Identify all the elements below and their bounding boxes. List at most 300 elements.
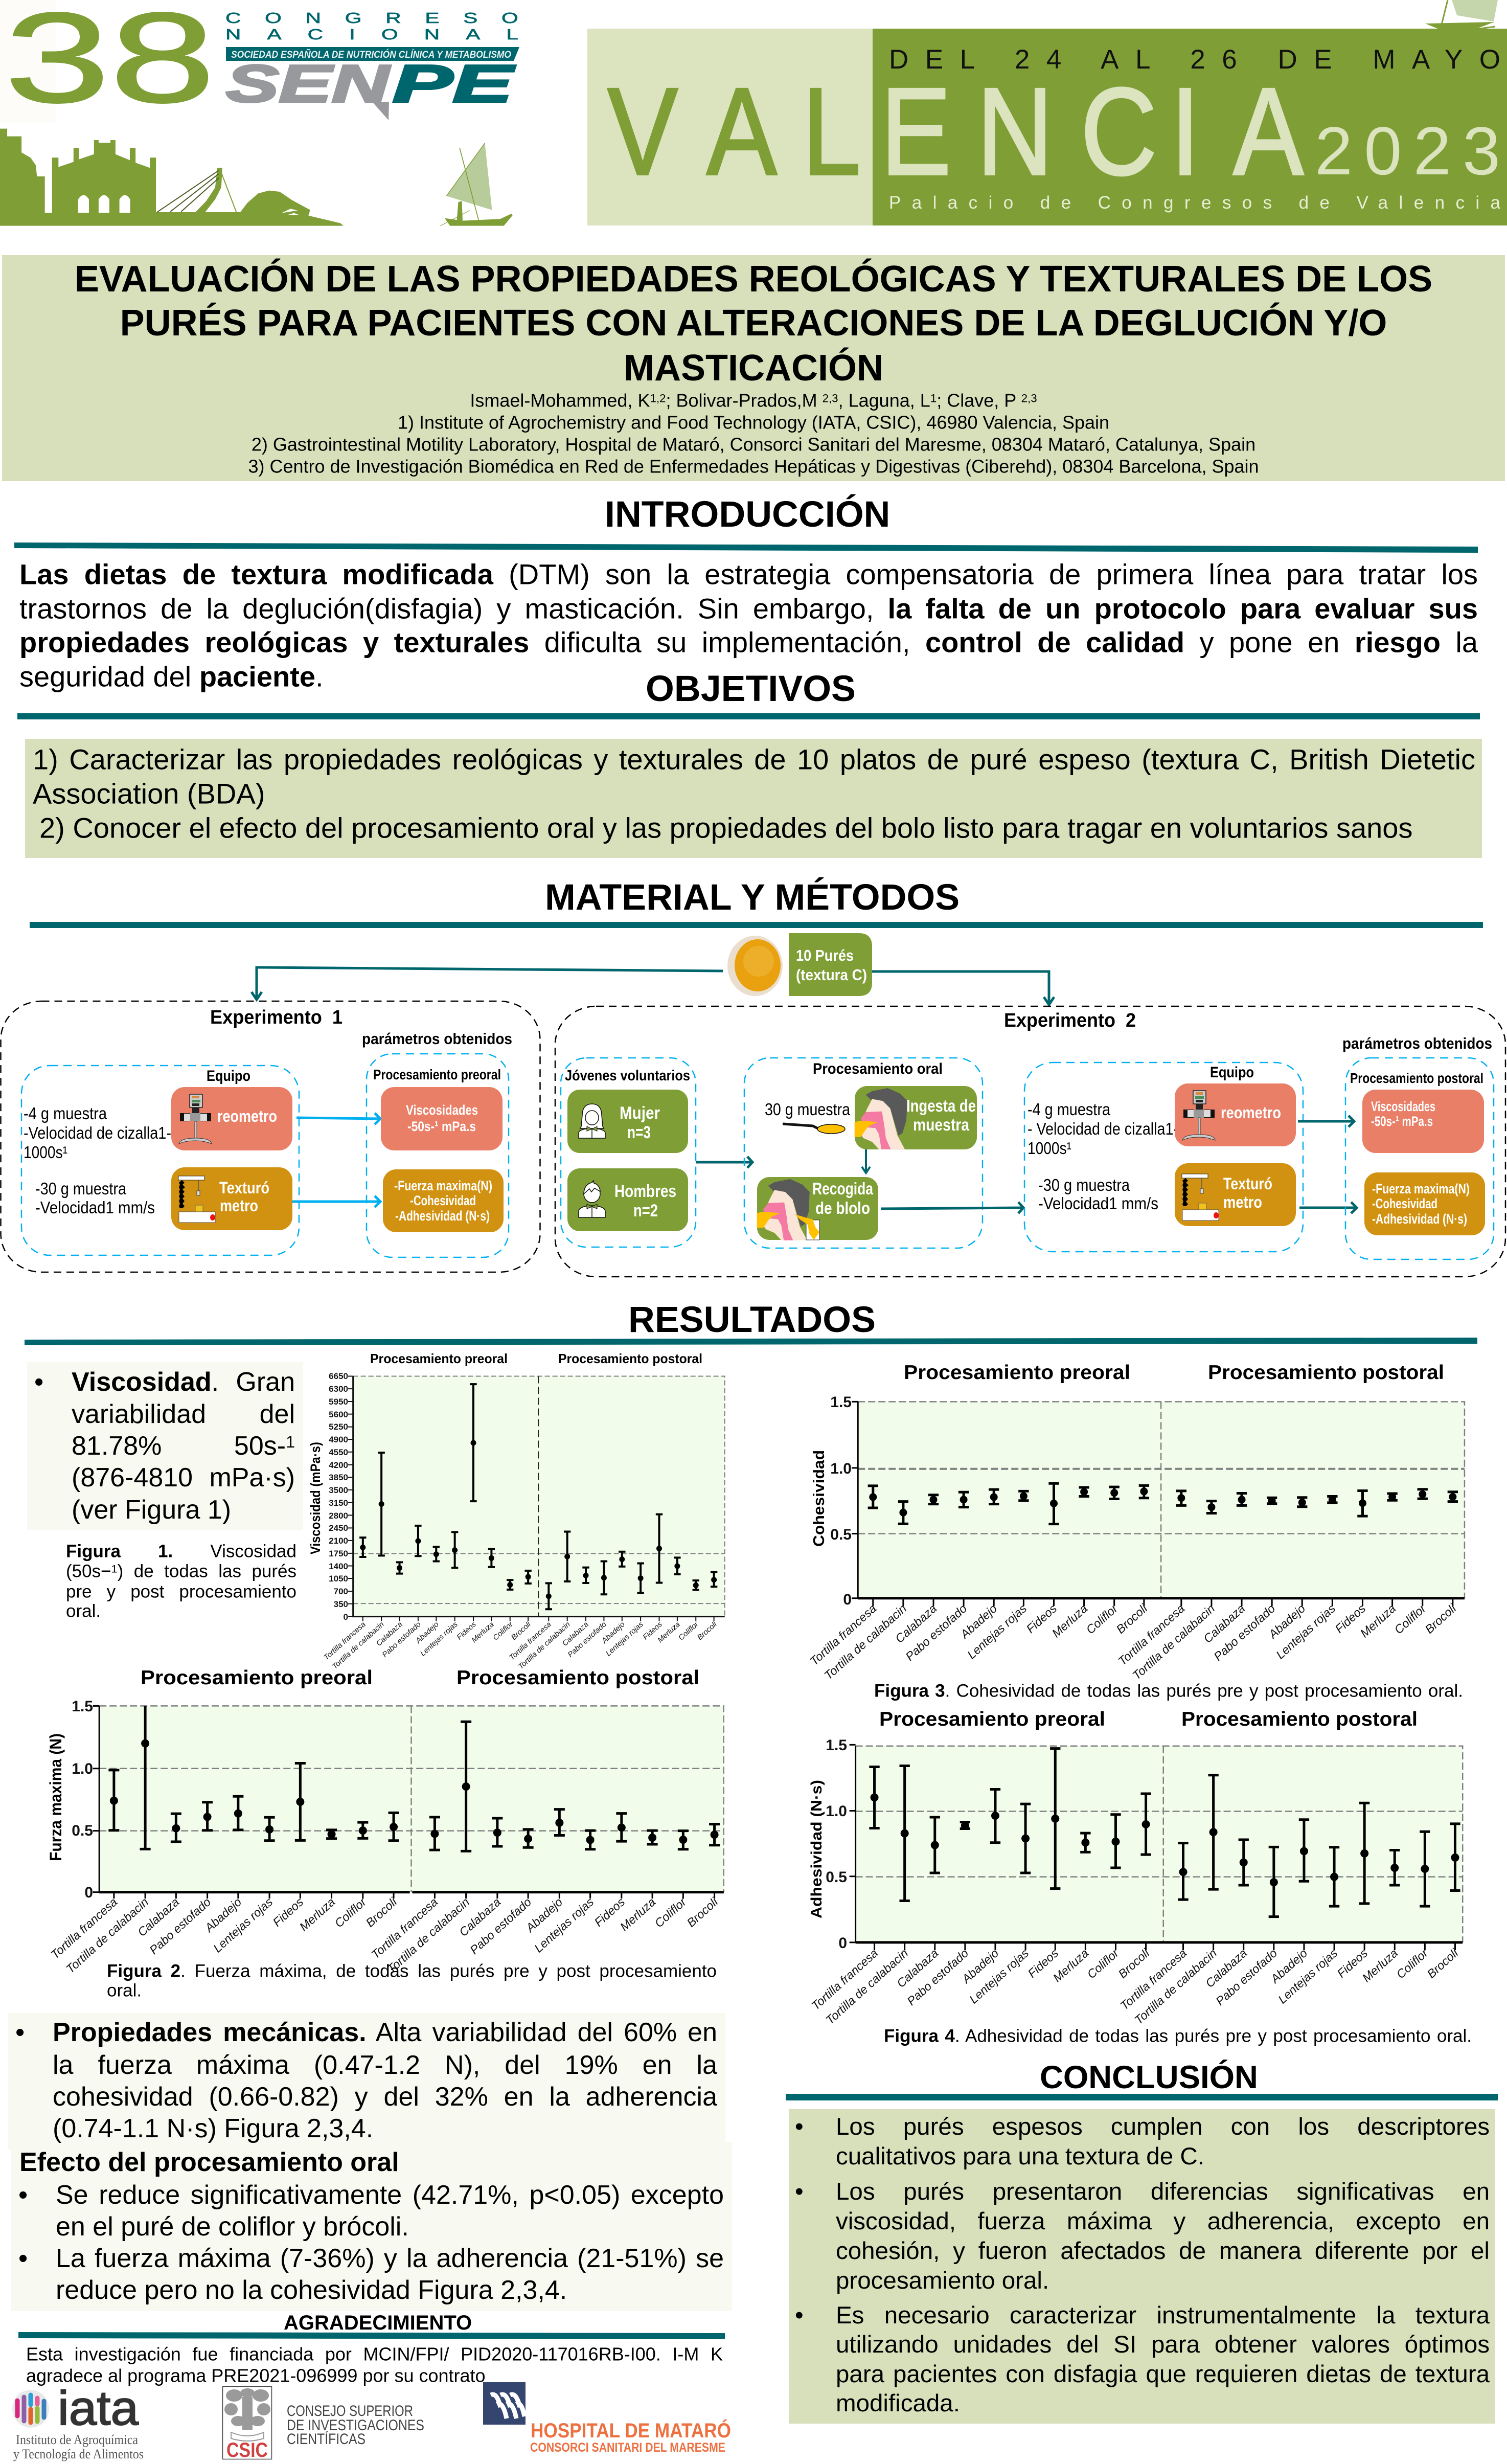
x axis labels: [323, 1620, 719, 1671]
Valencia skyline: [0, 129, 343, 226]
x axis labels: [807, 1601, 1459, 1682]
x axis labels: [809, 1946, 1461, 2027]
chart titles: Procesamiento postoral: [558, 1351, 702, 1366]
box: hombres: n=2: [633, 1201, 658, 1220]
panel: propiedades mecánicas and efecto del procesamiento oral: cohesividad (0.66-0.82) y del 32% en la adherencia: [53, 2082, 717, 2112]
box: texturometro: metro: [220, 1196, 258, 1215]
panel: propiedades mecánicas and efecto del procesamiento oral: •: [15, 2018, 25, 2047]
chart: figura 3 cohesividad: [803, 1360, 1472, 1692]
y axis scale: 0.5: [830, 1526, 852, 1543]
CSIC name: CIENTÍFICAS: [287, 2431, 366, 2448]
panel: conclusión: Los purés presentaron diferencias significativas en: [836, 2178, 1490, 2205]
x axis labels: Pabo estofado: [381, 1620, 423, 1659]
group: procesamiento oral: 30 g muestra: [765, 1100, 851, 1119]
caption: figura 2: [107, 1961, 717, 2000]
y axis scale: 1.0: [72, 1760, 93, 1777]
group: equipo: 1000s¹: [1028, 1139, 1071, 1158]
box: reometro: reometro: [1221, 1103, 1281, 1122]
x axis labels: Lentejas rojas: [1275, 1946, 1340, 2006]
box: fuerza, cohesividad, adhesividad: [383, 1169, 504, 1232]
arrow: to experimento 2: [872, 971, 1054, 1005]
x axis labels: Lentejas rojas: [419, 1620, 460, 1658]
caption: figura 1: [66, 1541, 296, 1621]
heading: parámetros obtenidos: parámetros obtenidos: [362, 1030, 512, 1048]
x axis labels: Coliflor: [1392, 1601, 1429, 1637]
y axis scale: 700: [334, 1587, 348, 1596]
x axis labels: Brocoli: [1116, 1946, 1152, 1981]
group: equipo: -30 g muestra: [1038, 1176, 1130, 1194]
arrow: texturometro to parameters: [292, 1196, 380, 1207]
viscosity error bars: [359, 1384, 717, 1609]
x axis labels: Calabaza: [1201, 1601, 1247, 1645]
box: viscosidades: -50s-¹ mPa.s: [407, 1119, 476, 1134]
box: 10 purés textura C: (textura C): [796, 966, 867, 984]
panel: conclusión: Los purés espesos cumplen con los descriptores: [836, 2113, 1490, 2140]
caption: figura 4: Figura 4. Adhesividad de todas las purés pre y post procesamiento oral.: [884, 2026, 1472, 2046]
box: ingesta de muestra: Ingesta de: [906, 1096, 976, 1115]
panel: viscosidad: •: [34, 1367, 43, 1397]
panel: propiedades mecánicas and efecto del procesamiento oral: (0.74-1.1 N·s) Figura 2,3,4.: [53, 2114, 373, 2143]
group: equipo: -30 g muestra: [35, 1179, 127, 1198]
panel: objetivos: Association (BDA): [33, 778, 265, 810]
x axis labels: Calabaza: [456, 1895, 503, 1939]
chart: figura 1 viscosidad: [308, 1351, 725, 1671]
panel: conclusión: viscosidad, fuerza máxima y adherencia, excepto en: [836, 2208, 1490, 2235]
caption: figura 2: oral.: [107, 1980, 142, 2000]
x axis labels: Merluza: [470, 1620, 496, 1644]
congreso nacional wordmark: [225, 10, 518, 42]
panel: conclusión: modificada.: [836, 2390, 960, 2417]
x axis labels: Lentejas rojas: [965, 1601, 1030, 1662]
group: jóvenes voluntarios: Jóvenes voluntarios: [565, 1068, 690, 1084]
x axis labels: Merluza: [1358, 1601, 1398, 1640]
panel: conclusión: •: [795, 2178, 804, 2205]
y axis scale: 4900: [329, 1435, 348, 1444]
y axis scale: 1.0: [830, 1460, 852, 1477]
group: equipo: [1024, 1063, 1303, 1252]
x axis labels: Lentejas rojas: [967, 1946, 1032, 2006]
panel: propiedades mecánicas and efecto del procesamiento oral: [8, 2013, 732, 2311]
box: texturometro: Texturó: [219, 1179, 269, 1197]
box: mujer: [567, 1090, 688, 1153]
y axis scale: 350: [334, 1599, 348, 1609]
y axis title: Cohesividad: [810, 1450, 828, 1547]
city name: ENCIA: [881, 62, 1304, 201]
arrow: reometro to viscosidades: [1298, 1116, 1354, 1127]
group: procesamiento postoral parameters: [1345, 1058, 1494, 1259]
authors and affiliations: 1) Institute of Agrochemistry and Food Technology (IATA, CSIC), 46980 Valencia, Spain: [398, 412, 1109, 433]
panel: conclusión: cohesión, y fueron afectados de manera diferente por el: [836, 2237, 1490, 2265]
x axis labels: Tortilla francesa: [809, 1946, 880, 2013]
divider: conclusión: [786, 2094, 1498, 2100]
plot area: [850, 1745, 1463, 1950]
arrow: voluntarios to procesamiento oral: [696, 1157, 752, 1168]
box: texturometro: Texturó: [1223, 1174, 1272, 1193]
y axis scale: 3150: [329, 1498, 348, 1508]
panel: propiedades mecánicas and efecto del procesamiento oral: •: [18, 2244, 28, 2273]
box: fuerza, cohesividad, adhesividad: -Cohesividad: [1372, 1196, 1437, 1211]
y axis scale: 1400: [329, 1562, 348, 1571]
panel: propiedades mecánicas and efecto del procesamiento oral: en el puré de coliflor y brócoli.: [56, 2212, 409, 2242]
box: fuerza, cohesividad, adhesividad: -Fuerza maxima(N): [1372, 1181, 1470, 1196]
divider: resultados: [25, 1338, 1477, 1345]
y axis scale: 4550: [329, 1448, 348, 1457]
x axis labels: Fideos: [592, 1895, 628, 1929]
panel: propiedades mecánicas and efecto del procesamiento oral: La fuerza máxima (7-36%) y la adherencia (21-51%) se: [56, 2244, 724, 2273]
x axis labels: Tortilla francesa: [323, 1620, 368, 1662]
heading: objetivos: OBJETIVOS: [646, 668, 856, 709]
panel: propiedades mecánicas and efecto del procesamiento oral: Se reduce significativamente (42.71%, p<0.05) excepto: [56, 2180, 724, 2210]
y axis scale: 4200: [329, 1460, 348, 1470]
x axis labels: Brocoli: [363, 1895, 400, 1930]
panel: objetivos: [25, 739, 1482, 858]
panel: viscosidad: (ver Figura 1): [72, 1495, 231, 1525]
box: viscosidades: [1362, 1090, 1484, 1153]
group: equipo: [21, 1066, 299, 1255]
box: fuerza, cohesividad, adhesividad: -Adhesividad (N·s): [395, 1208, 490, 1224]
box: recogida de bolo: de blolo: [815, 1199, 870, 1217]
x axis labels: Abadejo: [522, 1895, 565, 1935]
panel: conclusión: •: [795, 2302, 804, 2329]
x axis labels: Brocoli: [696, 1620, 719, 1642]
icon: bowl of purée: [727, 936, 783, 996]
group: equipo: Equipo: [1210, 1064, 1254, 1081]
x axis labels: Lentejas rojas: [1273, 1601, 1338, 1662]
y axis scale: 1750: [329, 1549, 348, 1558]
panel: experimento 1: [1, 1001, 540, 1272]
x axis labels: Brocoli: [510, 1620, 533, 1642]
text block: introducción: Las dietas de textura modificada (DTM) son la estrategia compensatoria de primera línea para tratar los: [19, 558, 1478, 591]
divider: agradecimiento: [18, 2332, 725, 2339]
x axis labels: Coliflor: [492, 1620, 515, 1642]
CSIC name: [287, 2403, 424, 2448]
chart titles: [904, 1362, 1444, 1384]
CSIC emblem: [223, 2387, 272, 2461]
text block: introducción: [19, 558, 1478, 693]
text block: agradecimiento: agradece al programa PRE2021-096999 por su contrato: [26, 2365, 486, 2386]
group: equipo: - Velocidad de cizalla1-: [1028, 1119, 1178, 1138]
arrow: reometro to viscosidades: [296, 1113, 380, 1124]
y axis scale: 1.5: [826, 1737, 847, 1754]
logo: CSIC: [220, 2383, 429, 2462]
x axis labels: Fideos: [270, 1895, 306, 1929]
divider: introducción: [14, 542, 1478, 553]
authors and affiliations: 3) Centro de Investigación Biomédica en Red de Enfermedades Hepáticas y Digestivas (Ciberehd), 08304 Barcelona, Spain: [248, 456, 1259, 477]
box: recogida de bolo: [757, 1177, 878, 1240]
box: ingesta de muestra: muestra: [913, 1115, 970, 1134]
y axis scale: 5600: [329, 1410, 348, 1419]
x axis labels: Merluza: [1049, 1601, 1090, 1640]
y axis scale: 0: [843, 1591, 852, 1608]
y axis scale: [830, 1394, 852, 1608]
group: equipo: -Velocidad1 mm/s: [35, 1198, 155, 1217]
chart: figura 2 fuerza máxima: [47, 1667, 724, 1976]
x axis labels: Fideos: [1024, 1601, 1060, 1636]
panel: conclusión: •: [795, 2113, 804, 2140]
box: reometro: [1175, 1083, 1296, 1146]
x axis labels: Tortilla francesa: [1117, 1946, 1189, 2013]
x axis labels: Coliflor: [332, 1895, 369, 1930]
x axis labels: Pabo estofado: [147, 1895, 213, 1957]
authors and affiliations: 2) Gastrointestinal Motility Laboratory, Hospital de Mataró, Consorci Sanitari del Maresme, 08304 Mataró, Catalunya, Spain: [252, 434, 1255, 455]
divider: material y métodos: [30, 922, 1483, 928]
x axis labels: Fideos: [455, 1620, 478, 1642]
panel: conclusión: cualitativos para una textura de C.: [836, 2143, 1204, 2170]
panel: conclusión: para pacientes con disfagia que requieren dietas de textura: [836, 2361, 1490, 2388]
heading: resultados: RESULTADOS: [628, 1299, 876, 1340]
chart titles: Procesamiento preoral: [879, 1708, 1105, 1730]
x axis labels: Pabo estofado: [904, 1946, 971, 2008]
heading: introducción: INTRODUCCIÓN: [605, 494, 890, 535]
box: 10 purés textura C: [789, 933, 872, 996]
panel: experimento 2: [555, 1006, 1505, 1277]
x axis labels: Calabaza: [893, 1601, 939, 1645]
group: equipo: Equipo: [207, 1068, 250, 1084]
group: jóvenes voluntarios: [561, 1058, 696, 1247]
x axis labels: Coliflor: [652, 1895, 689, 1930]
box: viscosidades: Viscosidades: [1371, 1099, 1435, 1114]
logo: 38 congreso nacional SENPE with Valencia skyline: [0, 0, 519, 226]
chart titles: Procesamiento preoral: [141, 1667, 373, 1689]
y axis scale: [826, 1737, 847, 1952]
panel: propiedades mecánicas and efecto del procesamiento oral: reduce pero no la cohesividad Figura 2,3,4.: [56, 2275, 567, 2305]
x axis labels: Calabaza: [894, 1946, 941, 1990]
caption: figura 2: Figura 2. Fuerza máxima, de todas las purés pre y post procesamiento: [107, 1961, 717, 1981]
box: recogida de bolo: Recogida: [812, 1179, 874, 1198]
x axis labels: Fideos: [1333, 1601, 1368, 1636]
x axis labels: Coliflor: [677, 1620, 700, 1642]
group: procesamiento preoral parameters: [367, 1054, 509, 1257]
box: viscosidades: -50s-¹ mPa.s: [1371, 1114, 1433, 1129]
x axis labels: Tortilla de calabacin: [331, 1620, 386, 1671]
adhesiveness error bars: [869, 1749, 1460, 1917]
group: procesamiento oral: Procesamiento oral: [813, 1060, 943, 1077]
text block: introducción: propiedades reológicas y texturales dificulta su implementación, control de calidad y pone en riesgo la: [19, 626, 1478, 659]
group: procesamiento oral: [744, 1058, 983, 1248]
chart titles: Procesamiento preoral: [370, 1351, 508, 1366]
x axis labels: Calabaza: [561, 1620, 590, 1648]
panel: propiedades mecánicas and efecto del procesamiento oral: Propiedades mecánicas. Alta variabilidad del 60% en: [53, 2018, 717, 2047]
x axis labels: Brocoli: [1425, 1946, 1461, 1981]
caption: figura 1: Figura 1. Viscosidad: [66, 1541, 296, 1561]
panel: objetivos: 1) Caracterizar las propiedades reológicas y texturales de 10 platos de puré espeso (textura C, British Dietetic: [33, 743, 1475, 776]
x axis labels: Abadejo: [957, 1601, 999, 1642]
heading: conclusión: CONCLUSIÓN: [1040, 2060, 1258, 2095]
y axis scale: 5250: [329, 1422, 348, 1432]
x axis labels: Coliflor: [1085, 1946, 1122, 1981]
Mataró emblem: [483, 2382, 526, 2425]
x axis labels: Abadejo: [1267, 1946, 1310, 1986]
x axis labels: Merluza: [1051, 1946, 1091, 1985]
y axis scale: 1050: [329, 1574, 348, 1584]
CSIC emblem: CSIC: [226, 2439, 268, 2461]
x axis labels: Pabo estofado: [566, 1620, 608, 1659]
SENPE logotype: PE: [393, 54, 516, 113]
x axis labels: Tortilla de calabacin: [821, 1601, 909, 1682]
x axis labels: Coliflor: [1084, 1601, 1121, 1637]
iata colored mark: [12, 2390, 49, 2428]
box: hombres: [567, 1168, 688, 1231]
x axis labels: Coliflor: [1394, 1946, 1431, 1981]
x axis labels: Merluza: [656, 1620, 682, 1644]
panel: viscosidad: (876-4810 mPa·s): [72, 1463, 295, 1493]
main title: PURÉS PARA PACIENTES CON ALTERACIONES DE LA DEGLUCIÓN Y/O: [120, 303, 1387, 344]
title panel: [2, 255, 1505, 481]
arrow: texturometro to parameters: [1299, 1202, 1357, 1213]
main title: EVALUACIÓN DE LAS PROPIEDADES REOLÓGICAS Y TEXTURALES DE LOS: [75, 259, 1432, 300]
x axis labels: [48, 1895, 721, 1976]
x axis labels: Tortilla francesa: [369, 1895, 440, 1961]
x axis labels: Brocoli: [684, 1895, 721, 1930]
x axis labels: Tortilla de calabacin: [384, 1895, 472, 1976]
box: 10 purés textura C: 10 Purés: [796, 946, 854, 964]
box: fuerza, cohesividad, adhesividad: -Adhesividad (N·s): [1372, 1211, 1467, 1227]
panel: conclusión: Es necesario caracterizar instrumentalmente la textura: [836, 2302, 1490, 2329]
box: ingesta de muestra: [855, 1086, 977, 1149]
divider: objetivos: [17, 713, 1480, 719]
panel: objetivos: 2) Conocer el efecto del procesamiento oral y las propiedades del bolo listo para tragar en voluntarios sanos: [39, 812, 1412, 844]
text block: agradecimiento: [26, 2344, 723, 2389]
x axis labels: Tortilla de calabacin: [1132, 1946, 1219, 2027]
y axis title: Furza maxima (N): [47, 1733, 65, 1861]
group: equipo: -Velocidad1 mm/s: [1038, 1194, 1158, 1213]
caption: figura 1: oral.: [66, 1601, 101, 1621]
x axis labels: Tortilla francesa: [807, 1601, 879, 1668]
logo: Hospital de Mataró: [481, 2380, 734, 2457]
panel: conclusión: [789, 2109, 1495, 2424]
box: viscosidades: Viscosidades: [406, 1102, 478, 1118]
x axis labels: Fideos: [1335, 1946, 1371, 1980]
banner: del 24 al 26 de mayo, Valencia 2023: [587, 0, 1507, 225]
group: equipo: -4 g muestra: [1028, 1100, 1111, 1119]
x axis labels: Tortilla francesa: [48, 1895, 120, 1961]
y axis scale: 0: [84, 1884, 93, 1901]
x axis labels: Abadejo: [958, 1946, 1001, 1986]
SENPE logotype: [226, 54, 516, 120]
x axis labels: Tortilla de calabacin: [1130, 1601, 1217, 1682]
x axis labels: Pabo estofado: [467, 1895, 534, 1957]
box: reometro: [171, 1087, 292, 1150]
cohesiveness error bars: [868, 1483, 1458, 1524]
y axis title: Viscosidad (mPa·s): [308, 1442, 323, 1554]
x axis labels: Calabaza: [375, 1620, 404, 1648]
x axis labels: Tortilla francesa: [508, 1620, 553, 1662]
institute name: Instituto de Agroquímica: [16, 2432, 138, 2447]
plot area: [348, 1376, 725, 1621]
text block: agradecimiento: Esta investigación fue financiada por MCIN/FPI/ PID2020-117016RB-I00. I-M K: [26, 2344, 723, 2365]
y axis scale: 0: [344, 1612, 348, 1622]
box: fuerza, cohesividad, adhesividad: -Cohesividad: [410, 1193, 476, 1208]
chart titles: [141, 1667, 699, 1689]
caption: figura 3: Figura 3. Cohesividad de todas las purés pre y post procesamiento oral.: [874, 1681, 1463, 1701]
icon: spoon: [783, 1124, 845, 1134]
small boat: [1422, 0, 1498, 36]
heading: experimento 2: Experimento 2: [1004, 1010, 1136, 1031]
group: procesamiento preoral parameters: Procesamiento preoral: [373, 1067, 501, 1082]
x axis labels: Pabo estofado: [903, 1601, 969, 1663]
flow diagram: methods: [0, 933, 1506, 1277]
congreso nacional wordmark: CONGRESO: [225, 10, 518, 26]
y axis scale: 0.5: [72, 1822, 93, 1839]
heading: parámetros obtenidos: parámetros obtenidos: [1342, 1034, 1492, 1052]
x axis labels: Abadejo: [600, 1620, 627, 1645]
x axis labels: Fideos: [642, 1620, 664, 1642]
x axis labels: Brocoli: [1114, 1601, 1150, 1636]
y axis scale: 2800: [329, 1511, 348, 1521]
y axis scale: [72, 1698, 93, 1901]
y axis scale: 0: [838, 1935, 847, 1952]
x axis labels: Tortilla de calabacin: [63, 1895, 151, 1976]
panel: viscosidad: Viscosidad. Gran: [72, 1367, 295, 1397]
x axis labels: Tortilla de calabacin: [823, 1946, 910, 2027]
box: hombres: Hombres: [614, 1182, 676, 1201]
group: equipo: -4 g muestra: [24, 1104, 107, 1123]
caption: figura 1: pre y post procesamiento: [66, 1581, 296, 1601]
plot area: [852, 1401, 1465, 1606]
group: equipo: -Velocidad de cizalla1-: [24, 1123, 171, 1142]
year: 2023: [1315, 114, 1500, 189]
text block: introducción: seguridad del paciente.: [19, 661, 324, 693]
x axis labels: Lentejas rojas: [604, 1620, 645, 1658]
y axis scale: 2450: [329, 1523, 348, 1533]
y axis scale: 6300: [329, 1384, 348, 1394]
x axis labels: Fideos: [1025, 1946, 1061, 1980]
logo: iata: [10, 2388, 148, 2462]
x axis labels: Abadejo: [201, 1895, 244, 1935]
y axis scale: 1.5: [830, 1394, 852, 1411]
x axis labels: Tortilla francesa: [1115, 1601, 1187, 1668]
main title: [75, 259, 1432, 389]
box: viscosidades: [381, 1087, 503, 1150]
sailing boat: [440, 143, 513, 226]
panel: viscosidad: 81.78% 50s-1: [72, 1431, 295, 1461]
panel: viscosidad: variabilidad del: [72, 1399, 295, 1429]
panel: conclusión: procesamiento oral.: [836, 2267, 1049, 2294]
x axis labels: Lentejas rojas: [211, 1895, 276, 1955]
x axis labels: Pabo estofado: [1211, 1601, 1277, 1663]
box: mujer: Mujer: [620, 1103, 660, 1123]
box: mujer: n=3: [627, 1123, 651, 1142]
panel: conclusión: utilizando unidades del SI para obtener valores óptimos: [836, 2331, 1490, 2358]
box: fuerza, cohesividad, adhesividad: -Fuerza maxima(N): [394, 1178, 492, 1193]
city name: [607, 62, 1304, 201]
y axis scale: 0.5: [826, 1869, 847, 1886]
x axis labels: Brocoli: [1423, 1601, 1459, 1636]
panel: propiedades mecánicas and efecto del procesamiento oral: •: [18, 2180, 28, 2210]
box: texturometro: metro: [1223, 1193, 1262, 1211]
main title: MASTICACIÓN: [624, 348, 883, 389]
x axis labels: Lentejas rojas: [532, 1895, 597, 1955]
venue: Palacio de Congresos de Valencia: [889, 193, 1501, 213]
box: texturometro: [1175, 1163, 1296, 1226]
city name: VAL: [607, 62, 861, 201]
x axis labels: Pabo estofado: [1213, 1946, 1280, 2008]
plot area: [93, 1706, 724, 1898]
x axis labels: Calabaza: [1203, 1946, 1249, 1990]
authors and affiliations: Ismael-Mohammed, K1,2; Bolivar-Prados,M 2,3, Laguna, L1; Clave, P 2,3: [470, 390, 1037, 411]
box: texturometro: [171, 1167, 292, 1230]
chart titles: Procesamiento postoral: [1208, 1362, 1444, 1384]
caption: figura 1: (50s−1) de todas las purés: [66, 1561, 296, 1581]
box: reometro: reometro: [217, 1107, 277, 1125]
y axis scale: 2100: [329, 1536, 348, 1546]
y axis scale: 3500: [329, 1485, 348, 1495]
chart titles: [879, 1708, 1418, 1730]
y axis scale: 3850: [329, 1473, 348, 1482]
heading: agradecimiento: AGRADECIMIENTO: [284, 2312, 472, 2334]
SENPE logotype: SEN: [226, 54, 391, 113]
panel: propiedades mecánicas and efecto del procesamiento oral: Efecto del procesamiento oral: [19, 2147, 399, 2177]
